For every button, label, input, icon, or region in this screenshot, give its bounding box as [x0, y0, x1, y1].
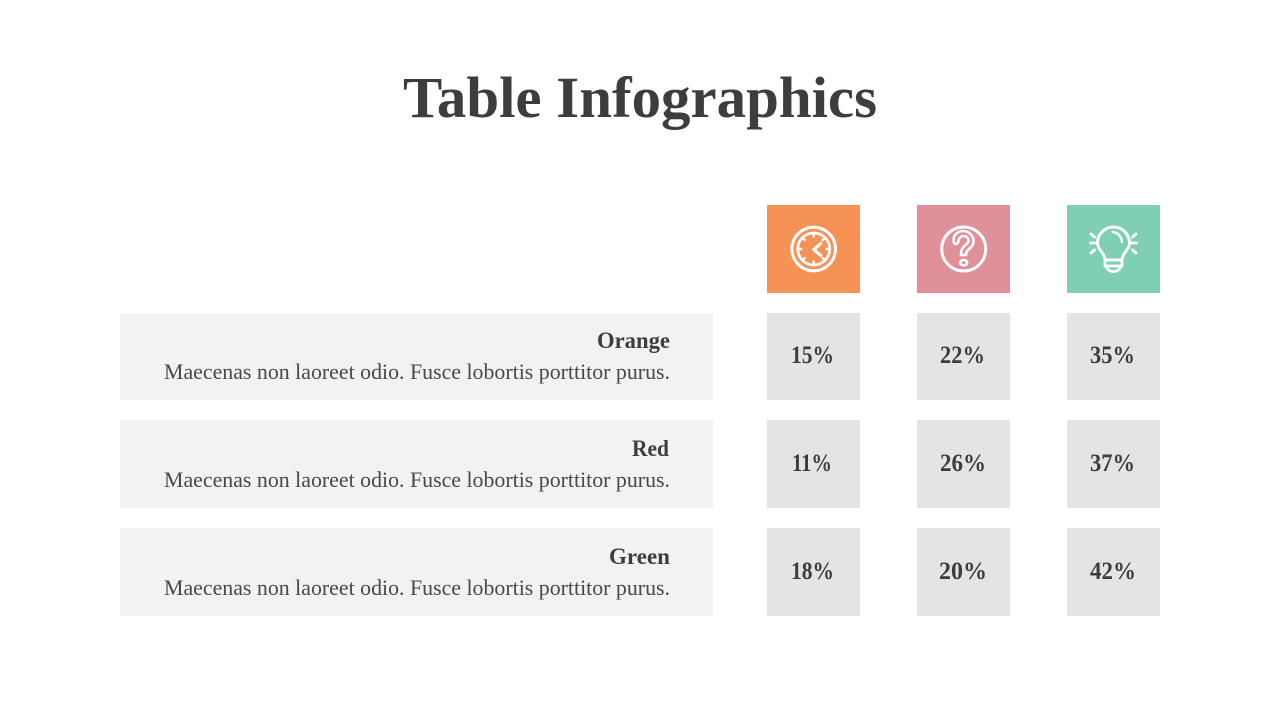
- icon tile: orange clock: [767, 205, 860, 293]
- row heading: Green: Green: [609, 544, 670, 570]
- value cell: Red 11%: 11%: [792, 450, 832, 477]
- value cell: Green 42%: 42%: [1090, 558, 1136, 585]
- value cell: Orange 35%: [1067, 313, 1160, 400]
- value cell: Green 20%: 20%: [939, 558, 987, 585]
- value cell: Orange 35%: 35%: [1090, 342, 1135, 369]
- value cell: Green 18%: 18%: [791, 558, 834, 585]
- title: Table Infographics: [403, 65, 877, 130]
- icon tile: pink question mark: [917, 205, 1010, 293]
- row panel: Orange: [120, 313, 713, 400]
- row description: Orange: Maecenas non laoreet odio. Fusce lobortis porttitor purus.: [164, 359, 670, 384]
- value cell: Green 18%: [767, 528, 860, 616]
- row panel: Green: [120, 528, 713, 616]
- value cell: Red 26%: 26%: [940, 450, 986, 477]
- value cell: Orange 15%: [767, 313, 860, 400]
- row description: Green: Maecenas non laoreet odio. Fusce lobortis porttitor purus.: [164, 575, 670, 600]
- row panel: Red: [120, 420, 713, 508]
- value cell: Orange 22%: 22%: [940, 342, 985, 369]
- value cell: Orange 15%: 15%: [791, 342, 834, 369]
- value cell: Red 26%: [917, 420, 1010, 508]
- row heading: Orange: Orange: [597, 328, 670, 354]
- icon tile: green light bulb: [1067, 205, 1160, 293]
- value cell: Red 37%: [1067, 420, 1160, 508]
- value cell: Green 20%: [917, 528, 1010, 616]
- row heading: Red: Red: [632, 436, 669, 462]
- value cell: Green 42%: [1067, 528, 1160, 616]
- row description: Red: Maecenas non laoreet odio. Fusce lobortis porttitor purus.: [164, 467, 670, 492]
- value cell: Red 11%: [767, 420, 860, 508]
- value cell: Red 37%: 37%: [1090, 450, 1135, 477]
- value cell: Orange 22%: [917, 313, 1010, 400]
